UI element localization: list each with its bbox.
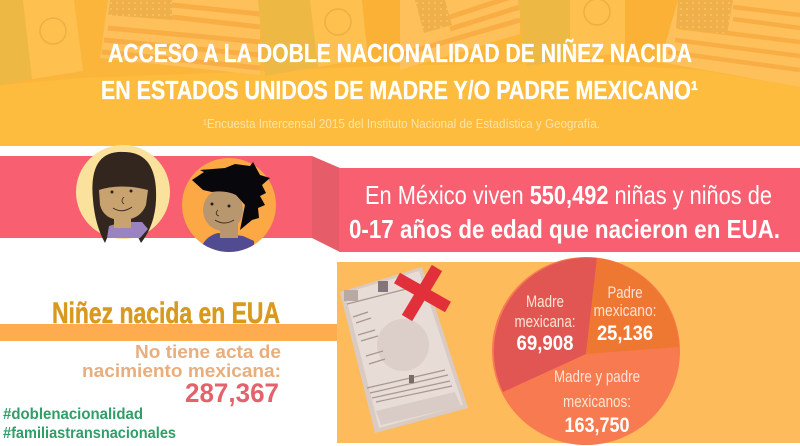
icon: red cross [397, 268, 448, 318]
text: no birth certificate: No tiene acta de [135, 342, 281, 362]
pie label: madre mexicana: mexicana: [514, 312, 576, 331]
title [101, 38, 698, 105]
text: no birth certificate [82, 342, 281, 381]
hashtags: #familiastransnacionales [3, 425, 176, 442]
pie label: padre mexicano: mexicano: [594, 301, 656, 320]
US flag, right [660, 0, 800, 87]
footnote: ¹Encuesta Intercensal 2015 del Instituto Nacional de Estadística y Geografía. [203, 116, 600, 131]
ribbon statement: En México viven 550,492 niñas y niños de [365, 180, 772, 210]
pie label: madre mexicana: 69,908 [516, 332, 574, 355]
icon: boy [182, 158, 276, 256]
icon: birth certificate [340, 267, 468, 433]
Mexican flag, right [518, 0, 680, 66]
pie label: madre y padre mexicanos: 163,750 [564, 414, 630, 437]
pie label: madre mexicana: Madre [526, 292, 564, 311]
US flag, middle [400, 0, 520, 70]
icon: girl [76, 145, 170, 243]
red ribbon [0, 156, 800, 252]
pie label: madre y padre mexicanos [554, 367, 640, 437]
US flag, left [100, 0, 260, 75]
hashtags [3, 406, 176, 442]
text: no birth certificate: nacimiento mexicana: [82, 361, 281, 381]
Mexican flag, left [0, 0, 83, 85]
pie label: madre mexicana [514, 292, 576, 355]
pie label: padre mexicano [594, 283, 656, 345]
right panel [337, 262, 800, 443]
pie label: madre y padre mexicanos: mexicanos: [563, 392, 631, 411]
header background [0, 0, 800, 146]
pie label: padre mexicano: Padre [608, 283, 642, 302]
number 287,367: 287,367 [185, 378, 279, 408]
ribbon statement [349, 180, 780, 244]
pie chart [492, 257, 680, 445]
icon: Mexican coats of arms [40, 0, 610, 44]
hashtags: #doblenacionalidad [3, 406, 143, 423]
heading: Niñez nacida en EUA: Niñez nacida en EUA [52, 297, 280, 330]
pie label: madre y padre mexicanos: Madre y padre [554, 367, 640, 386]
pie label: padre mexicano: 25,136 [597, 322, 653, 345]
left stripe [0, 324, 337, 341]
Mexican flag, middle [258, 0, 400, 76]
